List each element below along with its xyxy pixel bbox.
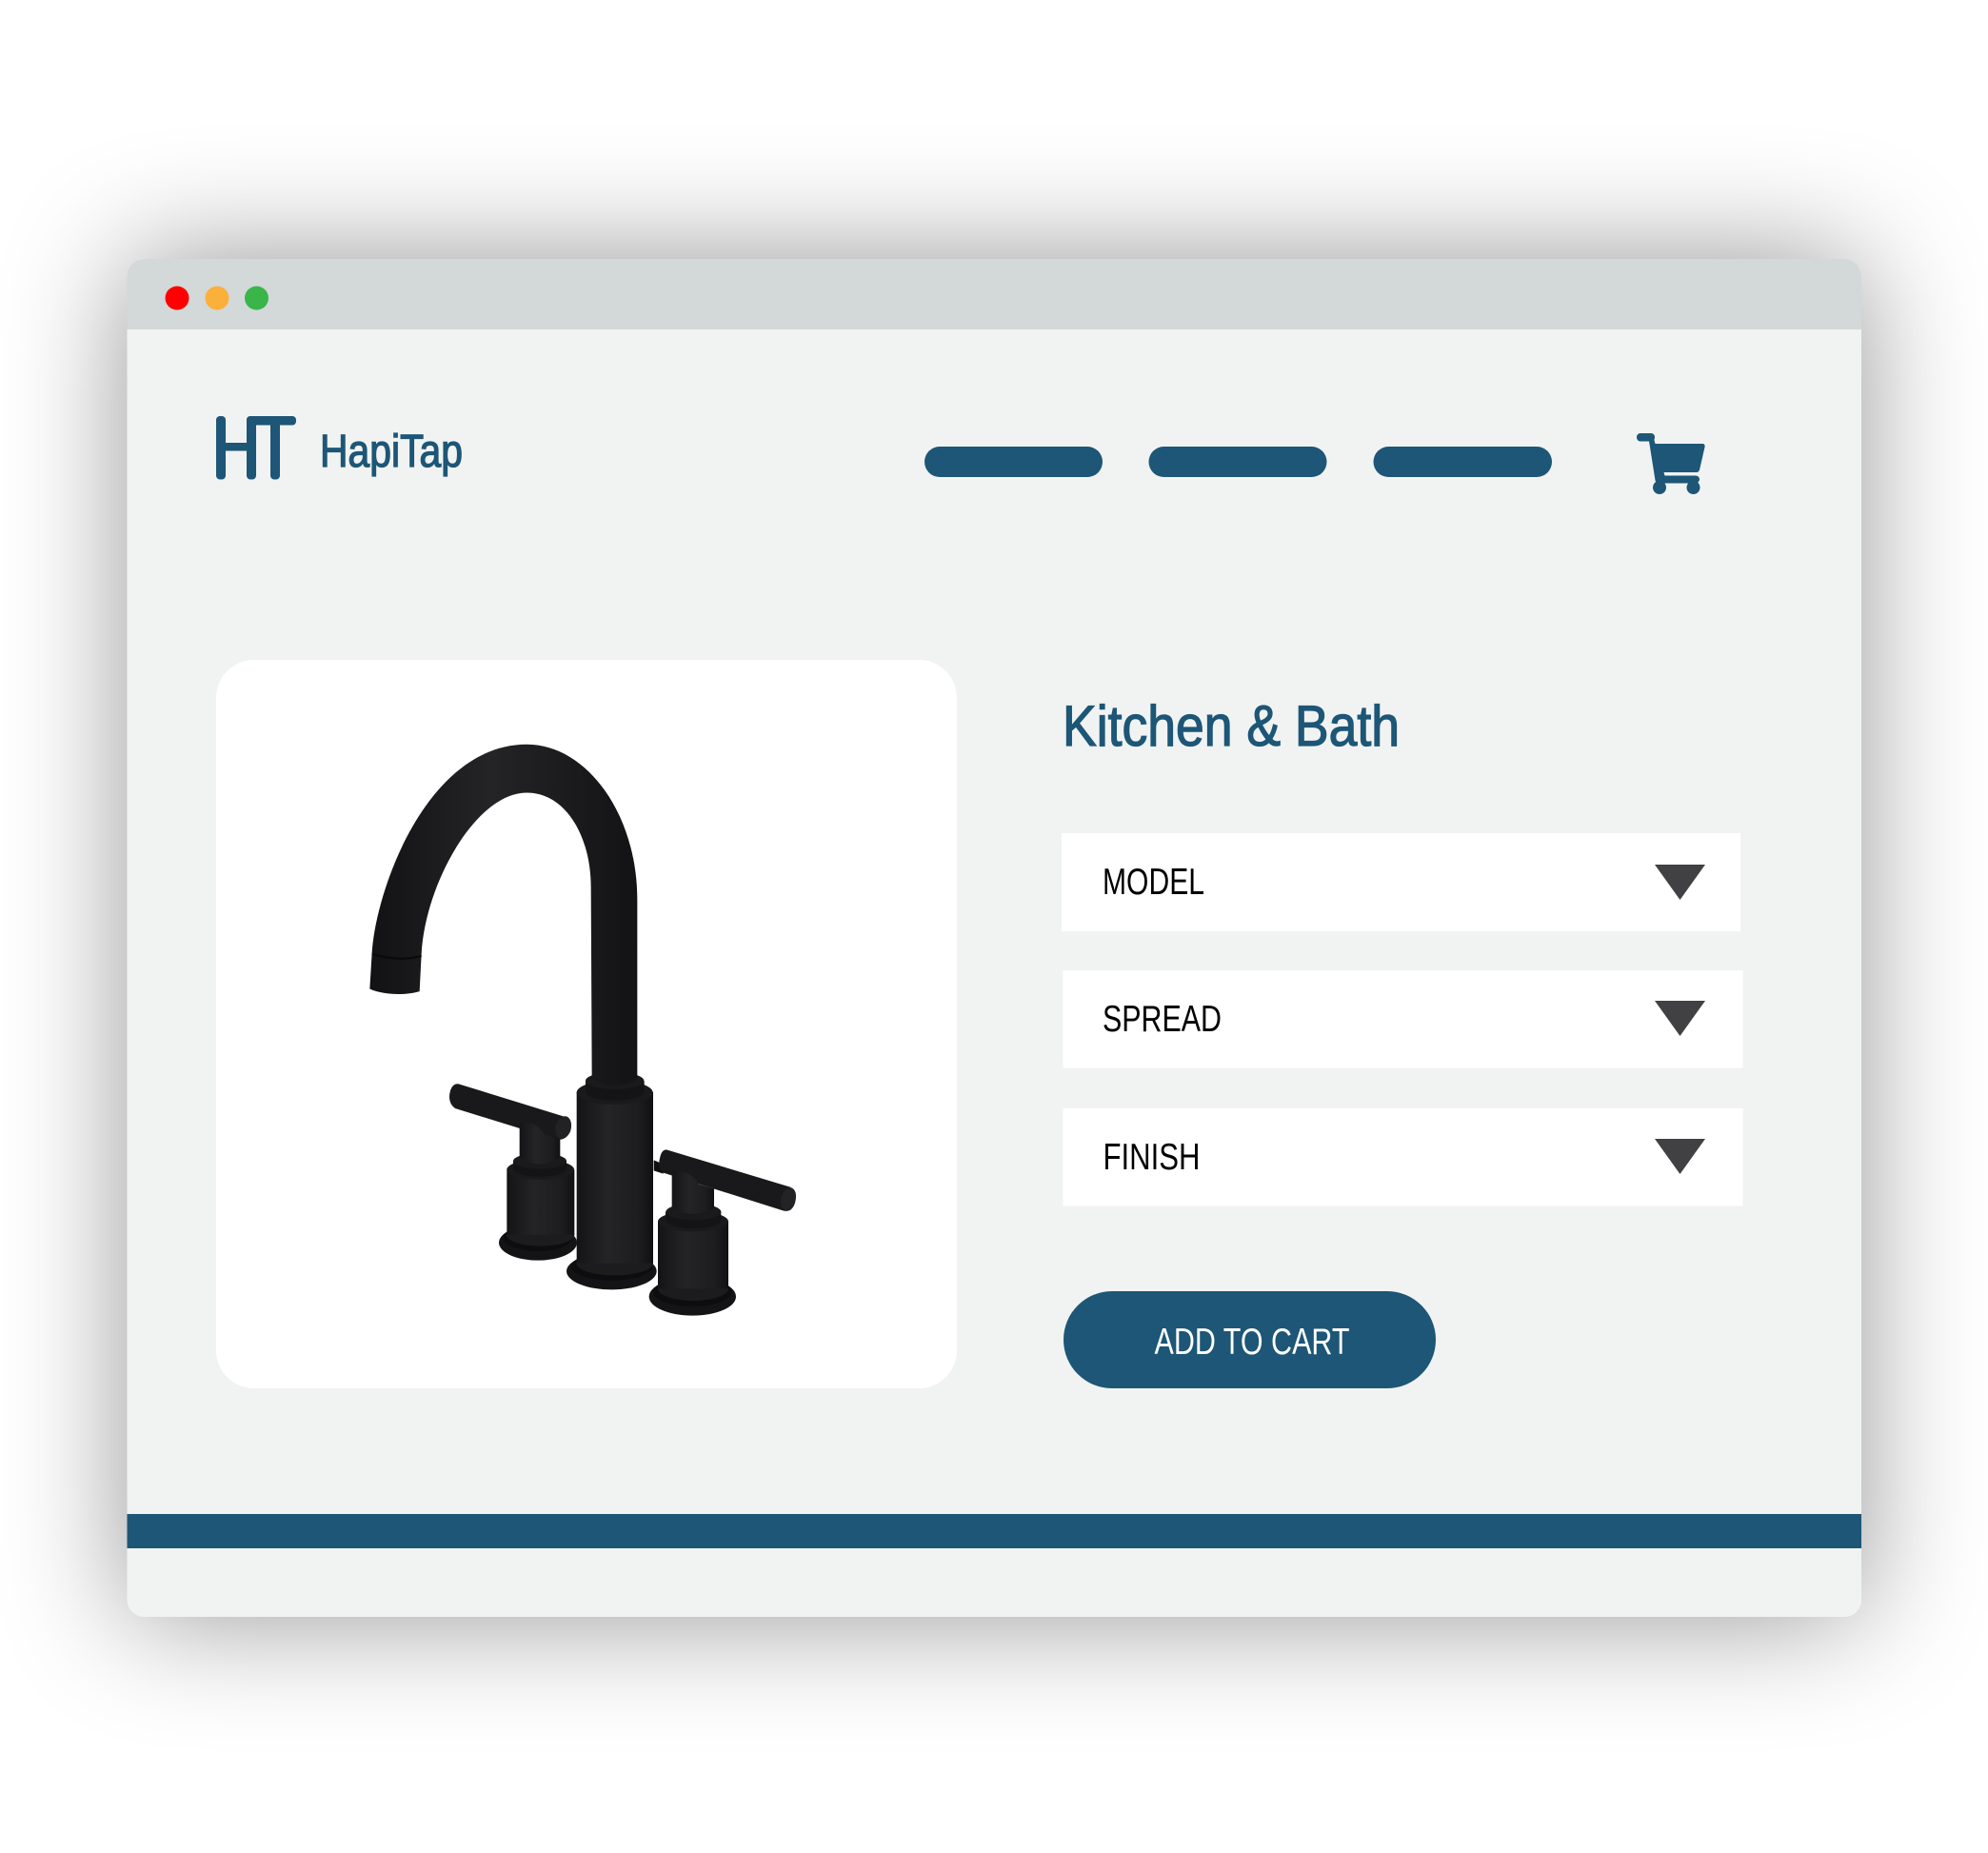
heading: Kitchen & Bath [1063, 694, 1400, 758]
dropdown: spread [1063, 970, 1742, 1068]
title bar [128, 259, 1861, 329]
logo wordmark: HapiTap [320, 427, 463, 477]
footer bar [128, 1514, 1861, 1548]
dropdown: finish [1063, 1108, 1742, 1205]
browser window [128, 259, 1861, 1617]
button: add to cart [1064, 1291, 1436, 1388]
logo: HT monogram [216, 416, 296, 480]
faucet illustration [369, 745, 799, 1316]
navigation pills [924, 447, 1552, 477]
browser window shadow [128, 259, 1861, 1617]
dropdown: finish: FINISH [1103, 1137, 1200, 1178]
left handle [449, 1084, 577, 1261]
spout seam [372, 952, 422, 960]
icon: shopping cart [1637, 433, 1705, 494]
spout [369, 745, 637, 1086]
panel: product image [216, 660, 957, 1388]
dropdown: model [1062, 833, 1740, 931]
central body [567, 1072, 657, 1289]
dropdown: spread: SPREAD [1103, 999, 1222, 1040]
dropdown: model: MODEL [1103, 862, 1204, 903]
right handle [649, 1149, 799, 1316]
window control dots [166, 286, 268, 310]
button: add to cart: ADD TO CART [1154, 1322, 1350, 1363]
